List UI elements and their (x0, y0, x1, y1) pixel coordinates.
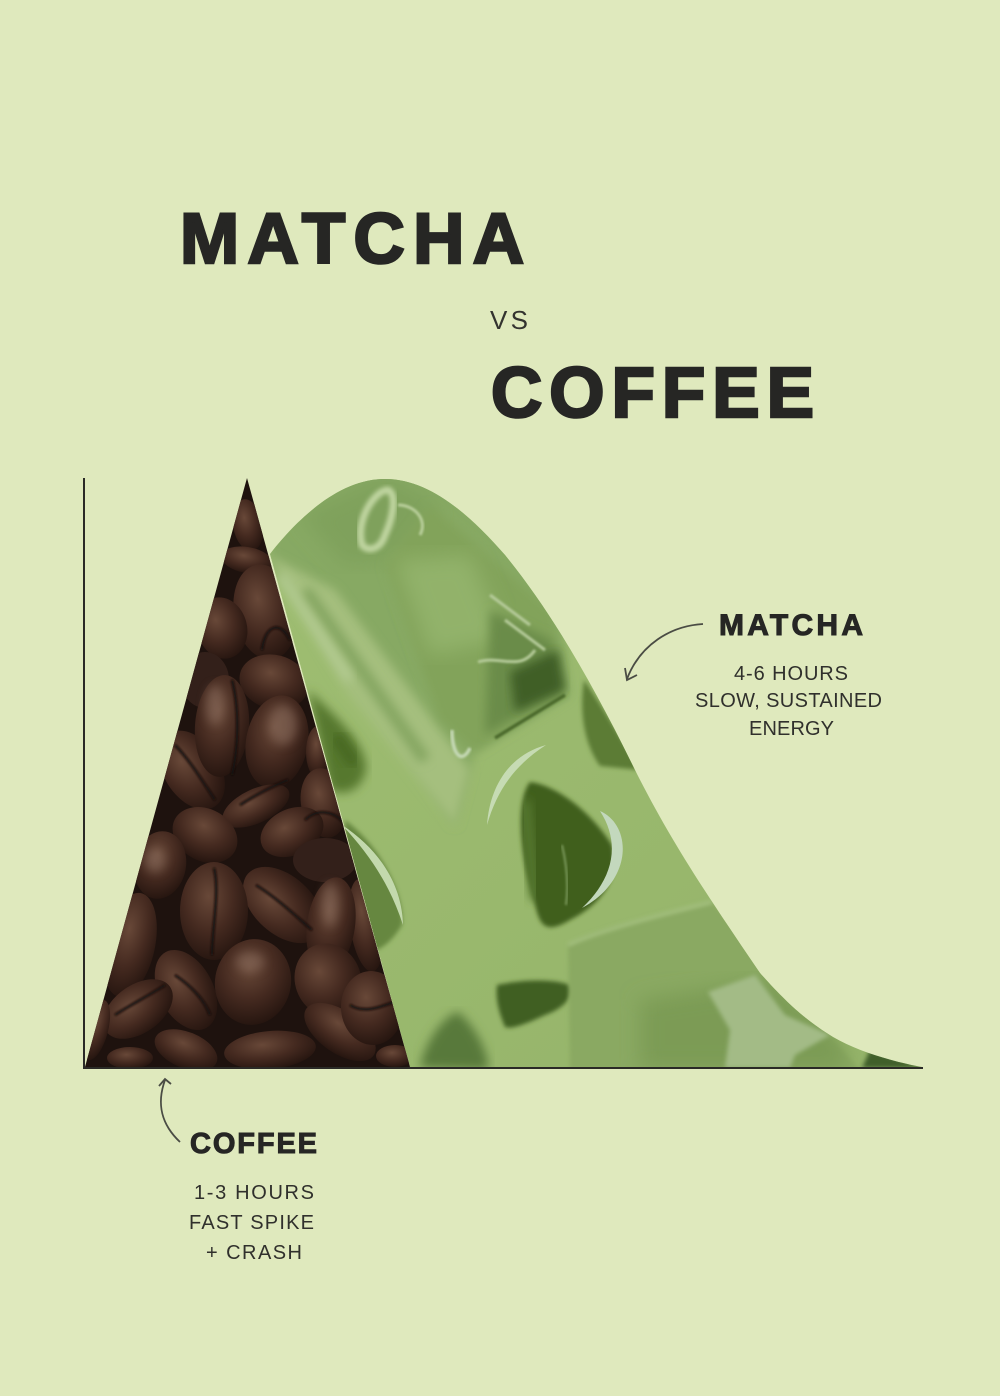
matcha description: ENERGY (749, 718, 834, 740)
coffee description: FAST SPIKE (189, 1212, 314, 1234)
coffee description: 1-3 HOURS (194, 1182, 314, 1204)
dark ice: bottom (420, 1012, 488, 1070)
left streaked ice band (268, 555, 470, 826)
label: matcha: MATCHA (719, 609, 863, 642)
matcha description (695, 663, 882, 740)
dark ice: left (308, 690, 366, 793)
pale patch (708, 975, 830, 1068)
arrow: matcha (625, 624, 703, 680)
dark ice: small block (497, 980, 571, 1028)
dark ice: center wedge (521, 782, 614, 927)
label: matcha (695, 609, 882, 740)
chart: energy curves (76, 470, 930, 1079)
arrow: coffee (159, 1079, 180, 1142)
dark tip (860, 1052, 921, 1067)
big ice cube (422, 522, 554, 748)
matcha description: SLOW, SUSTAINED (695, 690, 882, 712)
y axis (83, 478, 85, 1068)
dark ice: right edge (582, 680, 640, 770)
reflection on ice (452, 730, 470, 756)
label: coffee: COFFEE (190, 1128, 317, 1160)
label: coffee (189, 1128, 317, 1264)
crescent highlight (487, 745, 546, 825)
bean creases (115, 628, 400, 1015)
title: matcha: MATCHA (180, 200, 524, 279)
bean highlights (145, 685, 338, 972)
title: coffee: COFFEE (491, 354, 814, 433)
lower-right ice cube (568, 902, 860, 1070)
swirl highlight (361, 490, 393, 549)
coffee triangle with beans (76, 470, 420, 1079)
upper ice tone (270, 479, 569, 768)
title: vs: VS (490, 305, 528, 335)
dark ice: lower left, crescent (345, 820, 402, 951)
matcha description: 4-6 HOURS (734, 663, 848, 685)
matcha curve with iced latte texture (260, 470, 930, 1070)
x axis (83, 1067, 923, 1069)
top ice area (340, 479, 404, 542)
coffee description: + CRASH (206, 1242, 302, 1264)
coffee description (189, 1182, 314, 1264)
